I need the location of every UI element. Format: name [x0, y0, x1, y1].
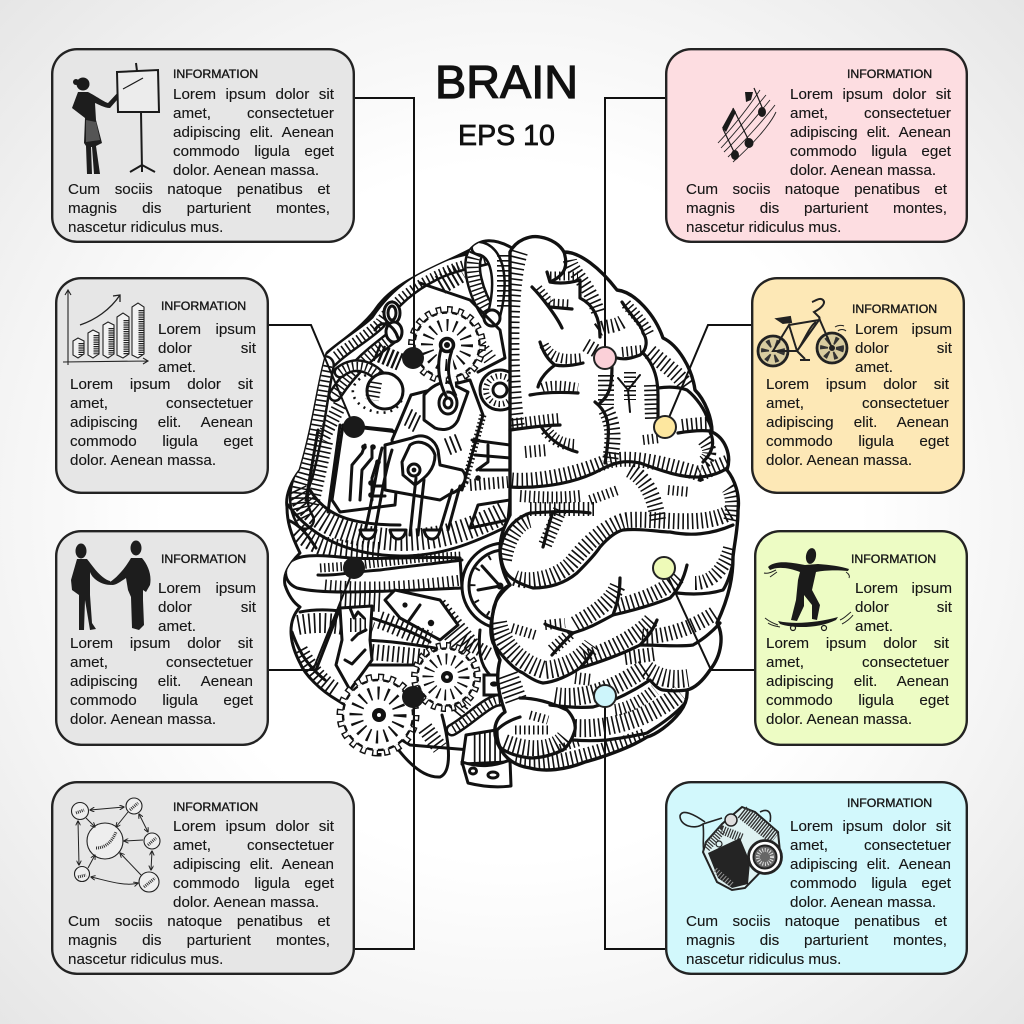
icon: network diagram — [70, 798, 161, 892]
connector: upper right panel to dot — [665, 325, 751, 427]
text: lorem ipsum: dolor. Aenean massa. — [790, 162, 936, 178]
text: lorem ipsum long — [766, 376, 949, 468]
heading: information: INFORMATION — [173, 800, 258, 814]
text: lorem ipsum: amet, consectetuer — [790, 836, 951, 854]
text: lorem ipsum short: dolor sit — [855, 598, 952, 616]
text: lorem ipsum: dolor. Aenean massa. — [173, 894, 319, 910]
heading: information: INFORMATION — [161, 552, 246, 566]
lower pipes and strap — [397, 675, 508, 777]
icon: music notes — [718, 88, 776, 162]
connector: upper left panel to dot — [269, 325, 354, 427]
text: lorem ipsum: adipiscing elit. Aenean — [790, 124, 951, 140]
text: lorem ipsum short: amet. — [158, 358, 196, 376]
yellow marker dot — [654, 416, 676, 438]
icon: camera — [679, 806, 783, 891]
heading: information: INFORMATION — [851, 552, 936, 566]
right hemisphere outline — [492, 237, 738, 770]
text: cum sociis: Cum sociis natoque penatibus et — [68, 912, 330, 930]
text: lorem ipsum long: commodo ligula eget — [70, 432, 253, 450]
text: cum sociis: magnis dis parturient montes, — [68, 932, 330, 948]
panel: network (bottom left) — [51, 781, 355, 975]
text: cum sociis: nascetur ridiculus mus. — [68, 218, 223, 236]
long tongue tube — [286, 556, 462, 592]
text: lorem ipsum: commodo ligula eget — [173, 142, 334, 160]
text: lorem ipsum long: Lorem ipsum dolor sit — [766, 634, 949, 652]
heading: information: INFORMATION — [847, 796, 932, 810]
ring washer with dots — [353, 373, 403, 413]
text: lorem ipsum long: Lorem ipsum dolor sit — [70, 634, 253, 652]
text: lorem ipsum long: amet, consectetuer — [70, 394, 253, 412]
text: cum sociis: Cum sociis natoque penatibus et — [68, 180, 330, 198]
text: lorem ipsum: Lorem ipsum dolor sit — [790, 818, 951, 834]
large loop link — [420, 248, 505, 372]
connector: lower right panel to dot — [664, 568, 754, 670]
text: lorem ipsum short: amet. — [855, 358, 893, 376]
text: lorem ipsum: commodo ligula eget — [790, 874, 951, 892]
lower left gear — [340, 677, 416, 753]
heading: information: INFORMATION — [852, 302, 937, 316]
hatched mechanical texture — [286, 242, 508, 694]
text: cum sociis: Cum sociis natoque penatibus et — [686, 912, 947, 930]
text: lorem ipsum: Lorem ipsum dolor sit — [173, 86, 334, 102]
text: lorem ipsum short — [855, 580, 952, 634]
text: lorem ipsum — [790, 86, 951, 178]
text: lorem ipsum short: amet. — [855, 618, 893, 634]
chain link rings — [375, 302, 402, 342]
text: lorem ipsum long: amet, consectetuer — [766, 654, 949, 670]
text: lorem ipsum long: commodo ligula eget — [766, 432, 949, 450]
panel: growth chart (upper left) — [55, 277, 269, 494]
text: cum sociis: magnis dis parturient montes, — [686, 200, 947, 216]
connector: top left panel to dot — [355, 98, 414, 358]
text: lorem ipsum long: Lorem ipsum dolor sit — [70, 376, 253, 392]
text: lorem ipsum short: Lorem ipsum — [158, 580, 256, 596]
text: cum sociis: nascetur ridiculus mus. — [686, 218, 841, 236]
cyan marker dot — [594, 685, 616, 707]
text: cum sociis — [68, 912, 330, 968]
outer left braided tube — [299, 365, 325, 520]
title: BRAIN — [435, 56, 578, 108]
text: cum sociis — [68, 180, 330, 236]
text: cum sociis: nascetur ridiculus mus. — [686, 950, 841, 968]
green marker dot — [653, 557, 675, 579]
brain and connector illustration — [269, 97, 754, 950]
text: lorem ipsum long: amet, consectetuer — [70, 654, 253, 670]
text: lorem ipsum: commodo ligula eget — [790, 142, 951, 160]
panel: handshake (lower left) — [55, 530, 269, 746]
text: lorem ipsum short: Lorem ipsum — [855, 580, 952, 596]
text: lorem ipsum long: commodo ligula eget — [70, 692, 253, 708]
text: lorem ipsum short — [855, 320, 952, 376]
text: lorem ipsum: amet, consectetuer — [173, 104, 334, 122]
text: lorem ipsum short: amet. — [158, 618, 196, 634]
text: lorem ipsum long — [70, 634, 253, 728]
lower ribbed bands — [292, 610, 445, 690]
clock dial — [460, 542, 504, 674]
text: lorem ipsum long: dolor. Aenean massa. — [70, 452, 216, 468]
heading: information: INFORMATION — [161, 299, 246, 313]
inner curved tubes — [335, 335, 400, 395]
pink marker dot — [594, 347, 616, 369]
text: lorem ipsum: Lorem ipsum dolor sit — [790, 86, 951, 102]
text: cum sociis: Cum sociis natoque penatibus et — [686, 180, 947, 198]
text: lorem ipsum: amet, consectetuer — [173, 836, 334, 854]
connector: bottom left panel to dot — [355, 697, 414, 949]
text: lorem ipsum: dolor. Aenean massa. — [173, 162, 319, 178]
text: lorem ipsum short — [158, 320, 256, 376]
text: lorem ipsum: adipiscing elit. Aenean — [173, 124, 334, 140]
small dial gear — [466, 368, 508, 412]
right hemisphere: organic — [491, 237, 738, 770]
text: lorem ipsum long — [766, 634, 949, 728]
text: lorem ipsum short: dolor sit — [158, 598, 256, 616]
text: lorem ipsum — [173, 818, 334, 910]
subtitle: EPS 10 — [458, 120, 555, 152]
text: lorem ipsum — [790, 818, 951, 910]
text: lorem ipsum: adipiscing elit. Aenean — [790, 856, 951, 872]
icon: bar chart — [63, 289, 149, 365]
heading: information: INFORMATION — [173, 67, 258, 81]
text: cum sociis — [686, 912, 947, 968]
text: lorem ipsum: Lorem ipsum dolor sit — [173, 818, 334, 834]
panel: music (top right) — [665, 48, 968, 243]
text: lorem ipsum long: Lorem ipsum dolor sit — [766, 376, 949, 392]
icon: presenter at easel — [72, 62, 160, 174]
tag chip plate — [392, 380, 483, 490]
text: lorem ipsum short: dolor sit — [158, 340, 256, 356]
connector: top right panel to dot — [605, 98, 665, 358]
panel: bicycle (upper right) — [751, 277, 965, 494]
text: lorem ipsum short: Lorem ipsum — [855, 320, 952, 338]
text: lorem ipsum — [173, 86, 334, 178]
connector: bottom right panel to dot — [605, 696, 665, 949]
panel: camera (bottom right) — [665, 781, 968, 975]
text: lorem ipsum long: dolor. Aenean massa. — [766, 452, 912, 468]
text: lorem ipsum short — [158, 580, 256, 634]
lower right gear — [414, 646, 478, 708]
hemisphere hatching — [498, 252, 732, 763]
text: cum sociis: magnis dis parturient montes, — [686, 932, 947, 948]
outer tube along upper edge — [330, 256, 490, 360]
text: lorem ipsum long: adipiscing elit. Aenean — [766, 672, 949, 690]
U-shaped connector chip — [364, 436, 510, 535]
text: lorem ipsum long: commodo ligula eget — [766, 692, 949, 708]
text: lorem ipsum long: adipiscing elit. Aenean — [70, 672, 253, 690]
text: lorem ipsum long: dolor. Aenean massa. — [766, 710, 912, 728]
icon: bicycle — [756, 298, 848, 368]
icon: two people shaking hands — [71, 540, 150, 630]
left hemisphere base shape — [285, 241, 512, 750]
panel: skateboarder (lower right) — [754, 530, 968, 746]
text: lorem ipsum: commodo ligula eget — [173, 874, 334, 892]
text: lorem ipsum: amet, consectetuer — [790, 104, 951, 122]
text: lorem ipsum long — [70, 376, 253, 468]
text: lorem ipsum long: adipiscing elit. Aenean — [70, 414, 253, 430]
text: lorem ipsum long: amet, consectetuer — [766, 394, 949, 412]
brain stem cap — [462, 760, 511, 787]
text: cum sociis — [686, 180, 947, 236]
heading: information: INFORMATION — [847, 67, 932, 81]
icon: skateboarder — [764, 548, 854, 632]
text: cum sociis: magnis dis parturient montes, — [68, 200, 330, 216]
panel: presentation (top left) — [51, 48, 355, 243]
top gear — [412, 310, 482, 380]
text: lorem ipsum: adipiscing elit. Aenean — [173, 856, 334, 872]
ribbed band below circuit — [288, 490, 510, 556]
text: lorem ipsum short: Lorem ipsum — [158, 320, 256, 338]
circuit board plate — [306, 405, 400, 512]
gyrus fold lines — [491, 252, 733, 758]
text: lorem ipsum long: adipiscing elit. Aenean — [766, 414, 949, 430]
screw tube — [340, 590, 470, 650]
marker dots on left hemisphere — [343, 347, 424, 708]
melting drip shape — [316, 606, 372, 690]
text: lorem ipsum long: dolor. Aenean massa. — [70, 710, 216, 728]
text: cum sociis: nascetur ridiculus mus. — [68, 950, 223, 968]
left hemisphere: mechanical — [283, 239, 512, 788]
text: lorem ipsum: dolor. Aenean massa. — [790, 894, 936, 910]
text: lorem ipsum short: dolor sit — [855, 340, 952, 356]
connector: lower left panel to dot — [269, 568, 354, 670]
tag link over top gear — [439, 349, 456, 398]
